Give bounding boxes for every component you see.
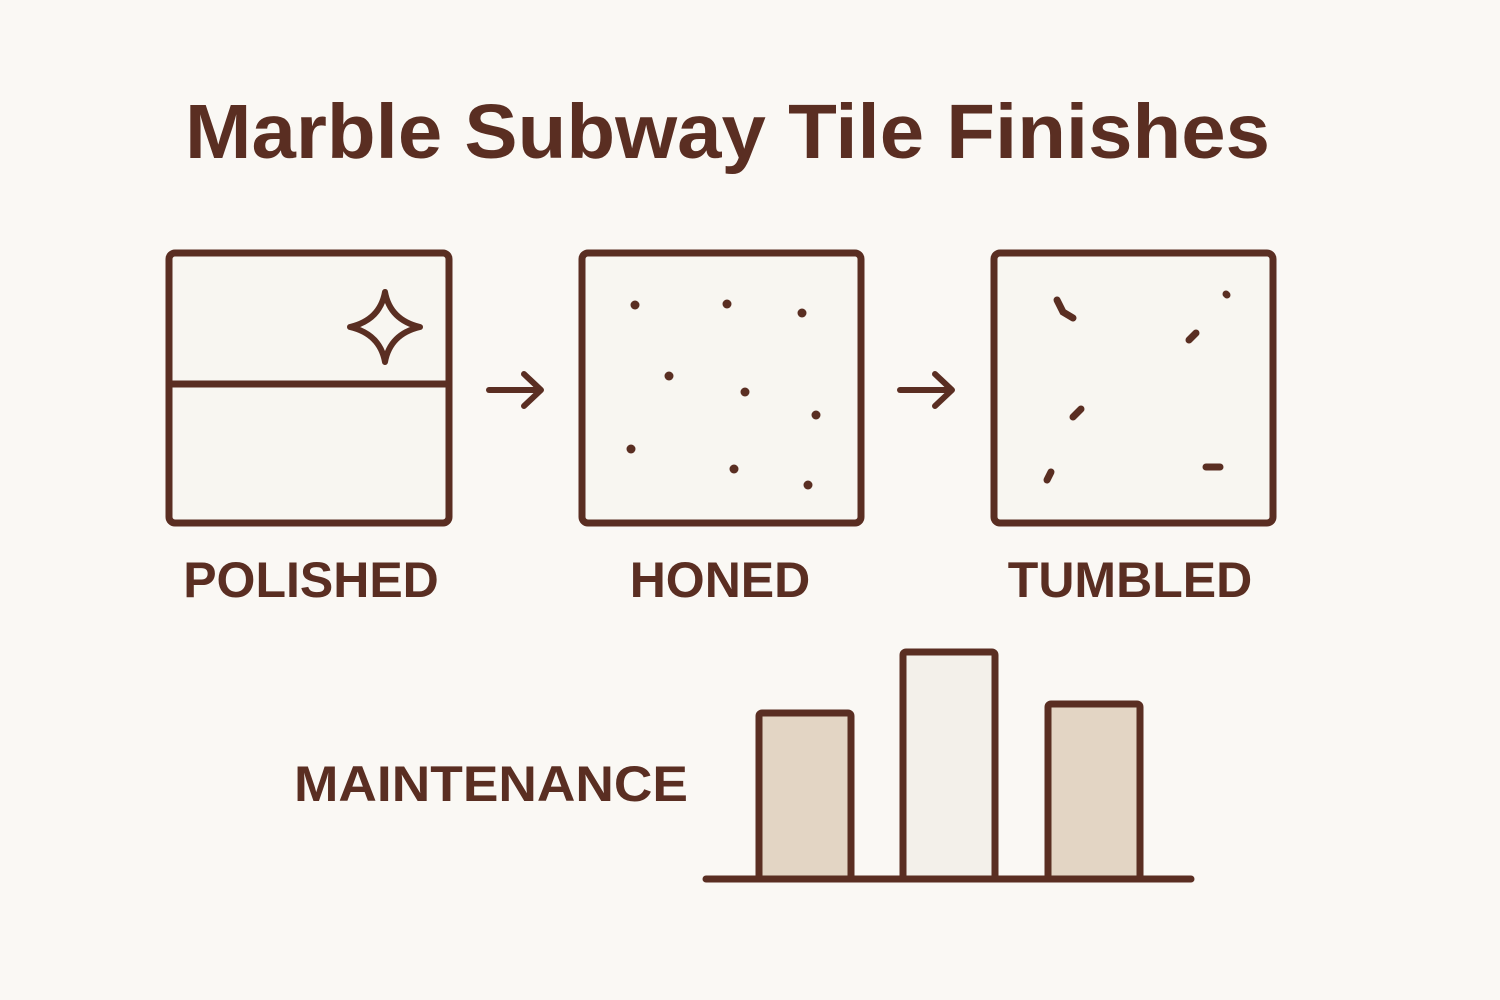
arrow 2 [900, 374, 952, 406]
title: Marble Subway Tile Finishes [185, 89, 1270, 175]
panel: tumbled tile [994, 253, 1273, 523]
bar chart [706, 652, 1191, 879]
label: tumbled: TUMBLED [1008, 552, 1252, 608]
arrow 1 [489, 374, 541, 406]
panel: polished tile [169, 253, 449, 523]
label: honed: HONED [630, 552, 810, 608]
panel: honed tile [582, 253, 861, 523]
icon: sparkle [350, 292, 420, 362]
label: polished: POLISHED [183, 552, 439, 608]
label: maintenance: MAINTENANCE [294, 756, 688, 812]
